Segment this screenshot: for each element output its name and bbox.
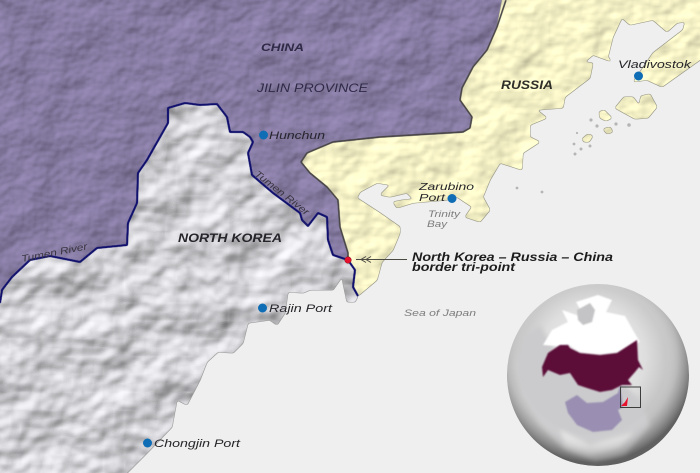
- city marker: Zarubino Port: Port: [419, 192, 446, 204]
- city marker: Chongjin Port: [143, 438, 241, 450]
- globe: locator box: [620, 387, 640, 408]
- callout: North Korea – Russia – China border tri-point: border tri-point: [412, 262, 516, 274]
- callout: North Korea – Russia – China border tri-point: [412, 252, 614, 274]
- label: Sea of Japan: Sea of Japan: [404, 308, 476, 319]
- arrow to tri-point: [356, 256, 407, 262]
- label: NORTH KOREA: NORTH KOREA: [178, 233, 282, 245]
- label: Tumen River (west): Tumen River: [20, 241, 89, 265]
- region: China (Jilin Province): [0, 0, 514, 320]
- globe: white arctic: [543, 295, 640, 354]
- locator globe: [507, 284, 689, 466]
- label: Trinity Bay: [427, 209, 462, 230]
- city marker: Vladivostok: Vladivostok: [618, 59, 692, 71]
- city marker: Hunchun: [259, 130, 325, 142]
- border river: Tumen River: [0, 103, 358, 303]
- city marker: Hunchun: Hunchun: [269, 130, 325, 142]
- globe: China: [565, 385, 623, 432]
- city marker: Zarubino Port: [418, 181, 474, 204]
- label: CHINA: CHINA: [261, 42, 304, 54]
- city marker: Rajin Port: Rajin Port: [269, 303, 333, 315]
- city marker: Vladivostok: [618, 59, 692, 80]
- label: Trinity Bay: Trinity: [428, 209, 462, 220]
- label: JILIN PROVINCE: JILIN PROVINCE: [256, 83, 368, 95]
- globe: Greenland grey: [577, 303, 595, 325]
- China–Russia border line: [301, 0, 506, 260]
- globe: highlighted area: [621, 397, 628, 406]
- city marker: Zarubino Port: Zarubino: [418, 181, 474, 193]
- globe: pale coastal band: [560, 431, 632, 456]
- callout: North Korea – Russia – China border tri-point: North Korea – Russia – China: [412, 252, 614, 264]
- region: Russia: [301, 0, 700, 296]
- region: North Korea: [0, 103, 358, 473]
- label: RUSSIA: RUSSIA: [501, 80, 553, 92]
- globe: shading: [511, 330, 689, 466]
- city marker: Chongjin Port: Chongjin Port: [154, 438, 241, 450]
- label: Trinity Bay: Bay: [427, 219, 449, 230]
- small islets: [516, 118, 631, 193]
- tri-point marker: [345, 257, 351, 263]
- globe: grey land masses: [515, 325, 650, 462]
- globe: Russia: [542, 340, 643, 392]
- label: Tumen River (east): Tumen River: [252, 169, 312, 219]
- city marker: Rajin Port: [258, 303, 333, 315]
